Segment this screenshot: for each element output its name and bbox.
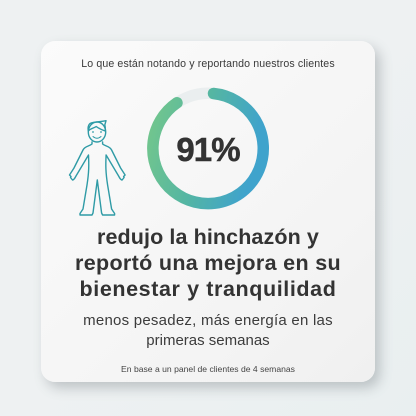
text: supporting line [83, 312, 333, 349]
heading: main statement: bienestar y tranquilidad [80, 277, 336, 301]
donut value arc [153, 94, 263, 204]
heading: main statement [75, 225, 341, 301]
donut track [153, 93, 263, 204]
heading: intro line: Lo que están notando y reportando nuestros clientes [81, 58, 335, 70]
footnote: En base a un panel de clientes de 4 semanas [121, 364, 295, 374]
panel: card [41, 41, 375, 382]
text: supporting line: menos pesadez, más energía en las [83, 312, 333, 329]
heading: main statement: redujo la hinchazón y [97, 225, 319, 249]
value: 91%: 91% [176, 131, 240, 168]
heading: main statement: reportó una mejora en su [75, 251, 341, 275]
icon: person [70, 121, 125, 215]
text: supporting line: primeras semanas [146, 332, 270, 349]
